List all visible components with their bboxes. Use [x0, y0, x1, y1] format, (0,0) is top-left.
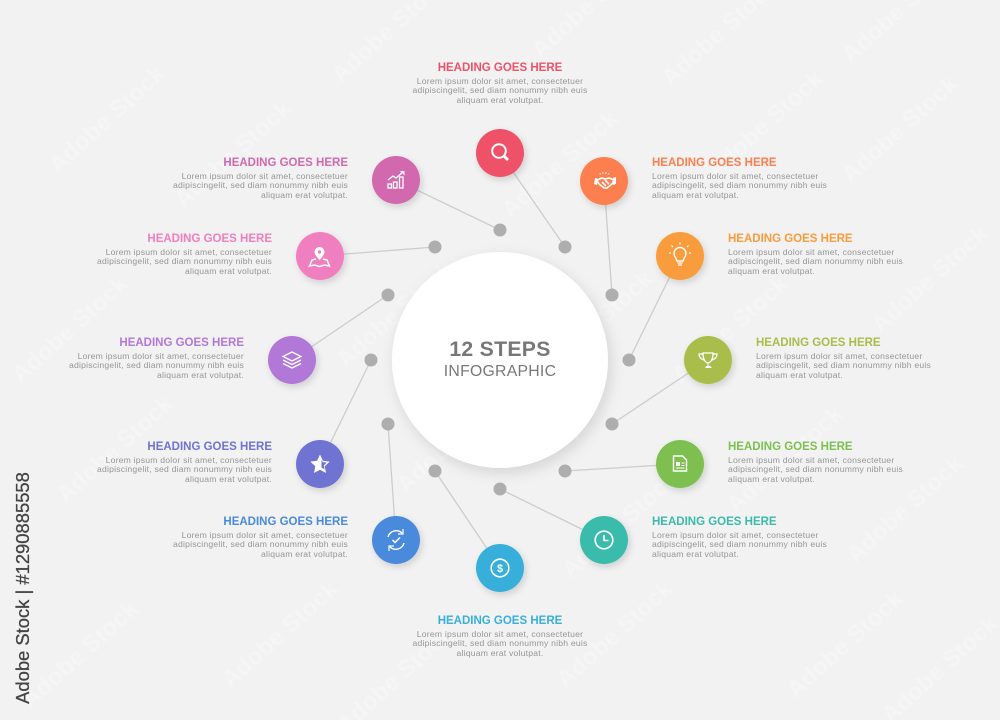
icon: refresh check	[372, 516, 420, 564]
heading block 3: Lorem ipsum dolor sit amet, consectetuer	[728, 247, 894, 257]
heading block 1: HEADING GOES HERE	[438, 62, 562, 74]
heading block 12	[173, 157, 348, 200]
heading block 11: Lorem ipsum dolor sit amet, consectetuer	[106, 247, 272, 257]
heading block 2: adipiscingelit, sed diam nonummy nibh euis	[652, 180, 827, 190]
heading block 3	[728, 233, 903, 276]
heading block 3: aliquam erat volutpat.	[728, 266, 815, 276]
center title	[444, 338, 556, 380]
heading block 4	[756, 337, 931, 380]
icon: clock	[580, 516, 628, 564]
text: Adobe Stock	[836, 70, 964, 189]
heading block 2: HEADING GOES HERE	[652, 157, 777, 169]
icon: document	[656, 440, 704, 488]
heading block 9: aliquam erat volutpat.	[185, 474, 272, 484]
heading block 2: Lorem ipsum dolor sit amet, consectetuer	[652, 171, 818, 181]
heading block 10: adipiscingelit, sed diam nonummy nibh euis	[69, 360, 244, 370]
text: Adobe Stock	[666, 270, 794, 389]
icon: star	[296, 440, 344, 488]
heading block 6: Lorem ipsum dolor sit amet, consectetuer	[652, 530, 818, 540]
heading block 10	[69, 337, 244, 380]
heading block 11: aliquam erat volutpat.	[185, 266, 272, 276]
heading block 1: Lorem ipsum dolor sit amet, consectetuer	[417, 76, 583, 86]
text: Adobe Stock	[51, 390, 179, 509]
heading block 10: Lorem ipsum dolor sit amet, consectetuer	[78, 351, 244, 361]
heading block 5: adipiscingelit, sed diam nonummy nibh euis	[728, 464, 903, 474]
heading block 10: HEADING GOES HERE	[119, 337, 244, 349]
text: Adobe Stock	[6, 270, 134, 389]
heading block 10: aliquam erat volutpat.	[157, 370, 244, 380]
heading block 2	[652, 157, 827, 200]
heading block 8: Lorem ipsum dolor sit amet, consectetuer	[182, 530, 348, 540]
heading block 11: adipiscingelit, sed diam nonummy nibh euis	[97, 256, 272, 266]
heading block 5: aliquam erat volutpat.	[728, 474, 815, 484]
text: Adobe Stock	[841, 450, 969, 569]
heading block 12: Lorem ipsum dolor sit amet, consectetuer	[182, 171, 348, 181]
text: Adobe Stock	[43, 60, 171, 179]
watermark id: Adobe Stock | #1290885558	[12, 472, 33, 704]
heading block 12: HEADING GOES HERE	[223, 157, 348, 169]
heading block 4: aliquam erat volutpat.	[756, 370, 843, 380]
icon: map pin	[296, 232, 344, 280]
center title: INFOGRAPHIC	[444, 363, 556, 380]
text: Adobe Stock	[391, 380, 519, 499]
center title: 12 STEPS	[449, 338, 551, 361]
heading block 12: aliquam erat volutpat.	[261, 190, 348, 200]
text: Adobe Stock	[701, 65, 829, 184]
text: Adobe Stock	[556, 465, 684, 584]
heading block 9: Lorem ipsum dolor sit amet, consectetuer	[106, 455, 272, 465]
icon: dollar: $	[497, 563, 503, 575]
heading block 2: aliquam erat volutpat.	[652, 190, 739, 200]
heading block 9	[97, 441, 272, 484]
heading block 12: adipiscingelit, sed diam nonummy nibh euis	[173, 180, 348, 190]
heading block 4: HEADING GOES HERE	[756, 337, 881, 349]
text: Adobe Stock	[781, 585, 909, 704]
heading block 8: HEADING GOES HERE	[223, 516, 348, 528]
text: Adobe Stock	[331, 255, 459, 374]
heading block 9: adipiscingelit, sed diam nonummy nibh euis	[97, 464, 272, 474]
icon: trophy	[684, 336, 732, 384]
heading block 4: adipiscingelit, sed diam nonummy nibh euis	[756, 360, 931, 370]
icon: growth chart	[372, 156, 420, 204]
heading block 7: HEADING GOES HERE	[438, 615, 562, 627]
heading block 9: HEADING GOES HERE	[147, 441, 272, 453]
text: Adobe Stock	[496, 105, 624, 224]
heading block 8	[173, 516, 348, 559]
heading block 3: adipiscingelit, sed diam nonummy nibh euis	[728, 256, 903, 266]
heading block 1: adipiscingelit, sed diam nonummy nibh euis	[412, 85, 588, 95]
text: Adobe Stock	[216, 575, 344, 694]
text: Adobe Stock	[531, 265, 659, 384]
heading block 1	[412, 62, 588, 105]
center circle	[392, 252, 608, 468]
heading block 7: aliquam erat volutpat.	[456, 648, 544, 658]
heading block 6	[652, 516, 827, 559]
heading block 6: HEADING GOES HERE	[652, 516, 777, 528]
heading block 6: adipiscingelit, sed diam nonummy nibh euis	[652, 539, 827, 549]
heading block 3: HEADING GOES HERE	[728, 233, 853, 245]
heading block 8: aliquam erat volutpat.	[261, 549, 348, 559]
heading block 5: Lorem ipsum dolor sit amet, consectetuer	[728, 455, 894, 465]
icon: light bulb	[656, 232, 704, 280]
text: Adobe Stock	[721, 400, 849, 519]
heading block 6: aliquam erat volutpat.	[652, 549, 739, 559]
icon: layers	[268, 336, 316, 384]
heading block 7: Lorem ipsum dolor sit amet, consectetuer	[417, 629, 583, 639]
heading block 11: HEADING GOES HERE	[147, 233, 272, 245]
heading block 8: adipiscingelit, sed diam nonummy nibh euis	[173, 539, 348, 549]
text: Adobe Stock	[551, 575, 679, 694]
icon: handshake	[580, 157, 628, 205]
heading block 7	[412, 615, 588, 658]
heading block 4: Lorem ipsum dolor sit amet, consectetuer	[756, 351, 922, 361]
heading block 7: adipiscingelit, sed diam nonummy nibh euis	[412, 638, 588, 648]
icon: search	[476, 129, 524, 177]
heading block 1: aliquam erat volutpat.	[456, 95, 544, 105]
heading block 5	[728, 441, 903, 484]
text: Adobe Stock	[16, 595, 144, 714]
heading block 5: HEADING GOES HERE	[728, 441, 853, 453]
text: Adobe Stock	[169, 95, 297, 214]
text: Adobe Stock	[866, 220, 994, 339]
heading block 11	[97, 233, 272, 276]
icon: dollar	[476, 544, 524, 592]
